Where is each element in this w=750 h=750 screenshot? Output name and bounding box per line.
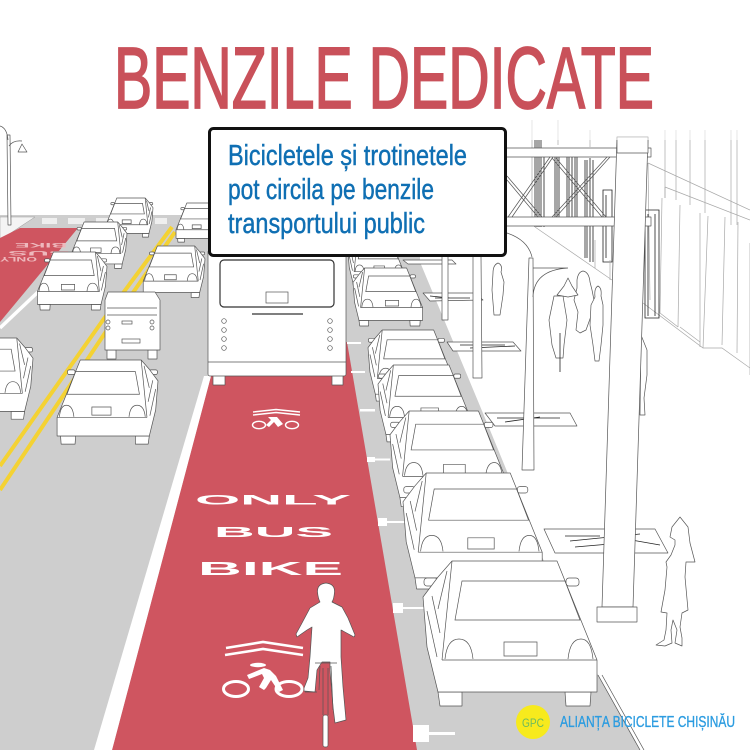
- sign text: pot circila pe benzile: [228, 174, 434, 206]
- car far left back: [106, 198, 153, 237]
- sign text: Bicicletele și trotinetele: [228, 140, 467, 172]
- bus: [208, 250, 346, 385]
- parked car 2: [368, 330, 453, 401]
- parked cars: [348, 240, 597, 706]
- street lamp head: [557, 278, 578, 297]
- person behind column: [640, 335, 647, 415]
- sign panel: [210, 128, 506, 256]
- top fade over building: [506, 110, 750, 140]
- lane marking text: ONLY: [195, 492, 354, 508]
- far lane reversed marking: ONLY: [0, 255, 37, 262]
- parked car 3: [378, 365, 470, 442]
- parking ticks: [347, 342, 455, 742]
- bus lights: [222, 319, 332, 350]
- road surface: [0, 215, 640, 750]
- woman standing: [656, 517, 695, 646]
- cyclist on sidewalk: [549, 296, 567, 358]
- car centre second: [143, 246, 205, 297]
- logo badge: [516, 705, 550, 739]
- lane marking text: BIKE: [198, 559, 343, 579]
- far lane reversed marking: BIKE: [13, 241, 67, 248]
- logo badge: GPC: [522, 716, 544, 730]
- couple: [574, 271, 595, 333]
- far lane reversed marking: [0, 241, 70, 262]
- far lane reversed marking: BUS: [5, 249, 70, 256]
- rider: [296, 583, 355, 723]
- car left third: [37, 252, 107, 310]
- planters: [403, 260, 668, 553]
- left street lamp: [0, 126, 27, 225]
- white lane divider: [94, 376, 211, 750]
- bus lane: [112, 342, 417, 750]
- person by pole: [492, 263, 504, 315]
- yellow double centre line: [0, 227, 175, 490]
- parked car 6: [423, 561, 597, 706]
- gantry column: [597, 137, 648, 622]
- poles: [442, 233, 568, 470]
- sign text: transportului public: [228, 208, 425, 240]
- building and sidewalk line work: [532, 120, 750, 375]
- bicycle: [305, 663, 337, 747]
- parked car 1: [353, 268, 423, 326]
- car cut off at left edge: [0, 338, 33, 419]
- sign text: [228, 140, 467, 240]
- car centre back: [176, 203, 223, 242]
- crosswalk stripes: [42, 218, 167, 224]
- parked car 5: [403, 473, 542, 589]
- lane marking text: [195, 492, 354, 579]
- lane marking: large bike symbol: [224, 642, 303, 696]
- gantry beams: [506, 148, 651, 226]
- cyclist in lane: [296, 583, 355, 747]
- left lane traffic: [0, 198, 223, 444]
- parked car 4: [390, 411, 505, 507]
- far red bus lane: [0, 228, 78, 328]
- parked car behind: [348, 240, 404, 286]
- storefront hatching: [535, 140, 659, 318]
- logo: [516, 705, 735, 739]
- information sign: [210, 128, 506, 256]
- bus rear window: [220, 260, 334, 307]
- pedestrians and cyclist: [492, 263, 647, 415]
- lane marking text: BUS: [214, 524, 333, 541]
- delivery van: [105, 292, 160, 359]
- car front left: [57, 360, 158, 444]
- lane marking: small bike symbol: [252, 410, 300, 429]
- curb lines: [598, 675, 644, 750]
- car left second: [71, 222, 127, 268]
- sidewalk island top left: [0, 217, 35, 240]
